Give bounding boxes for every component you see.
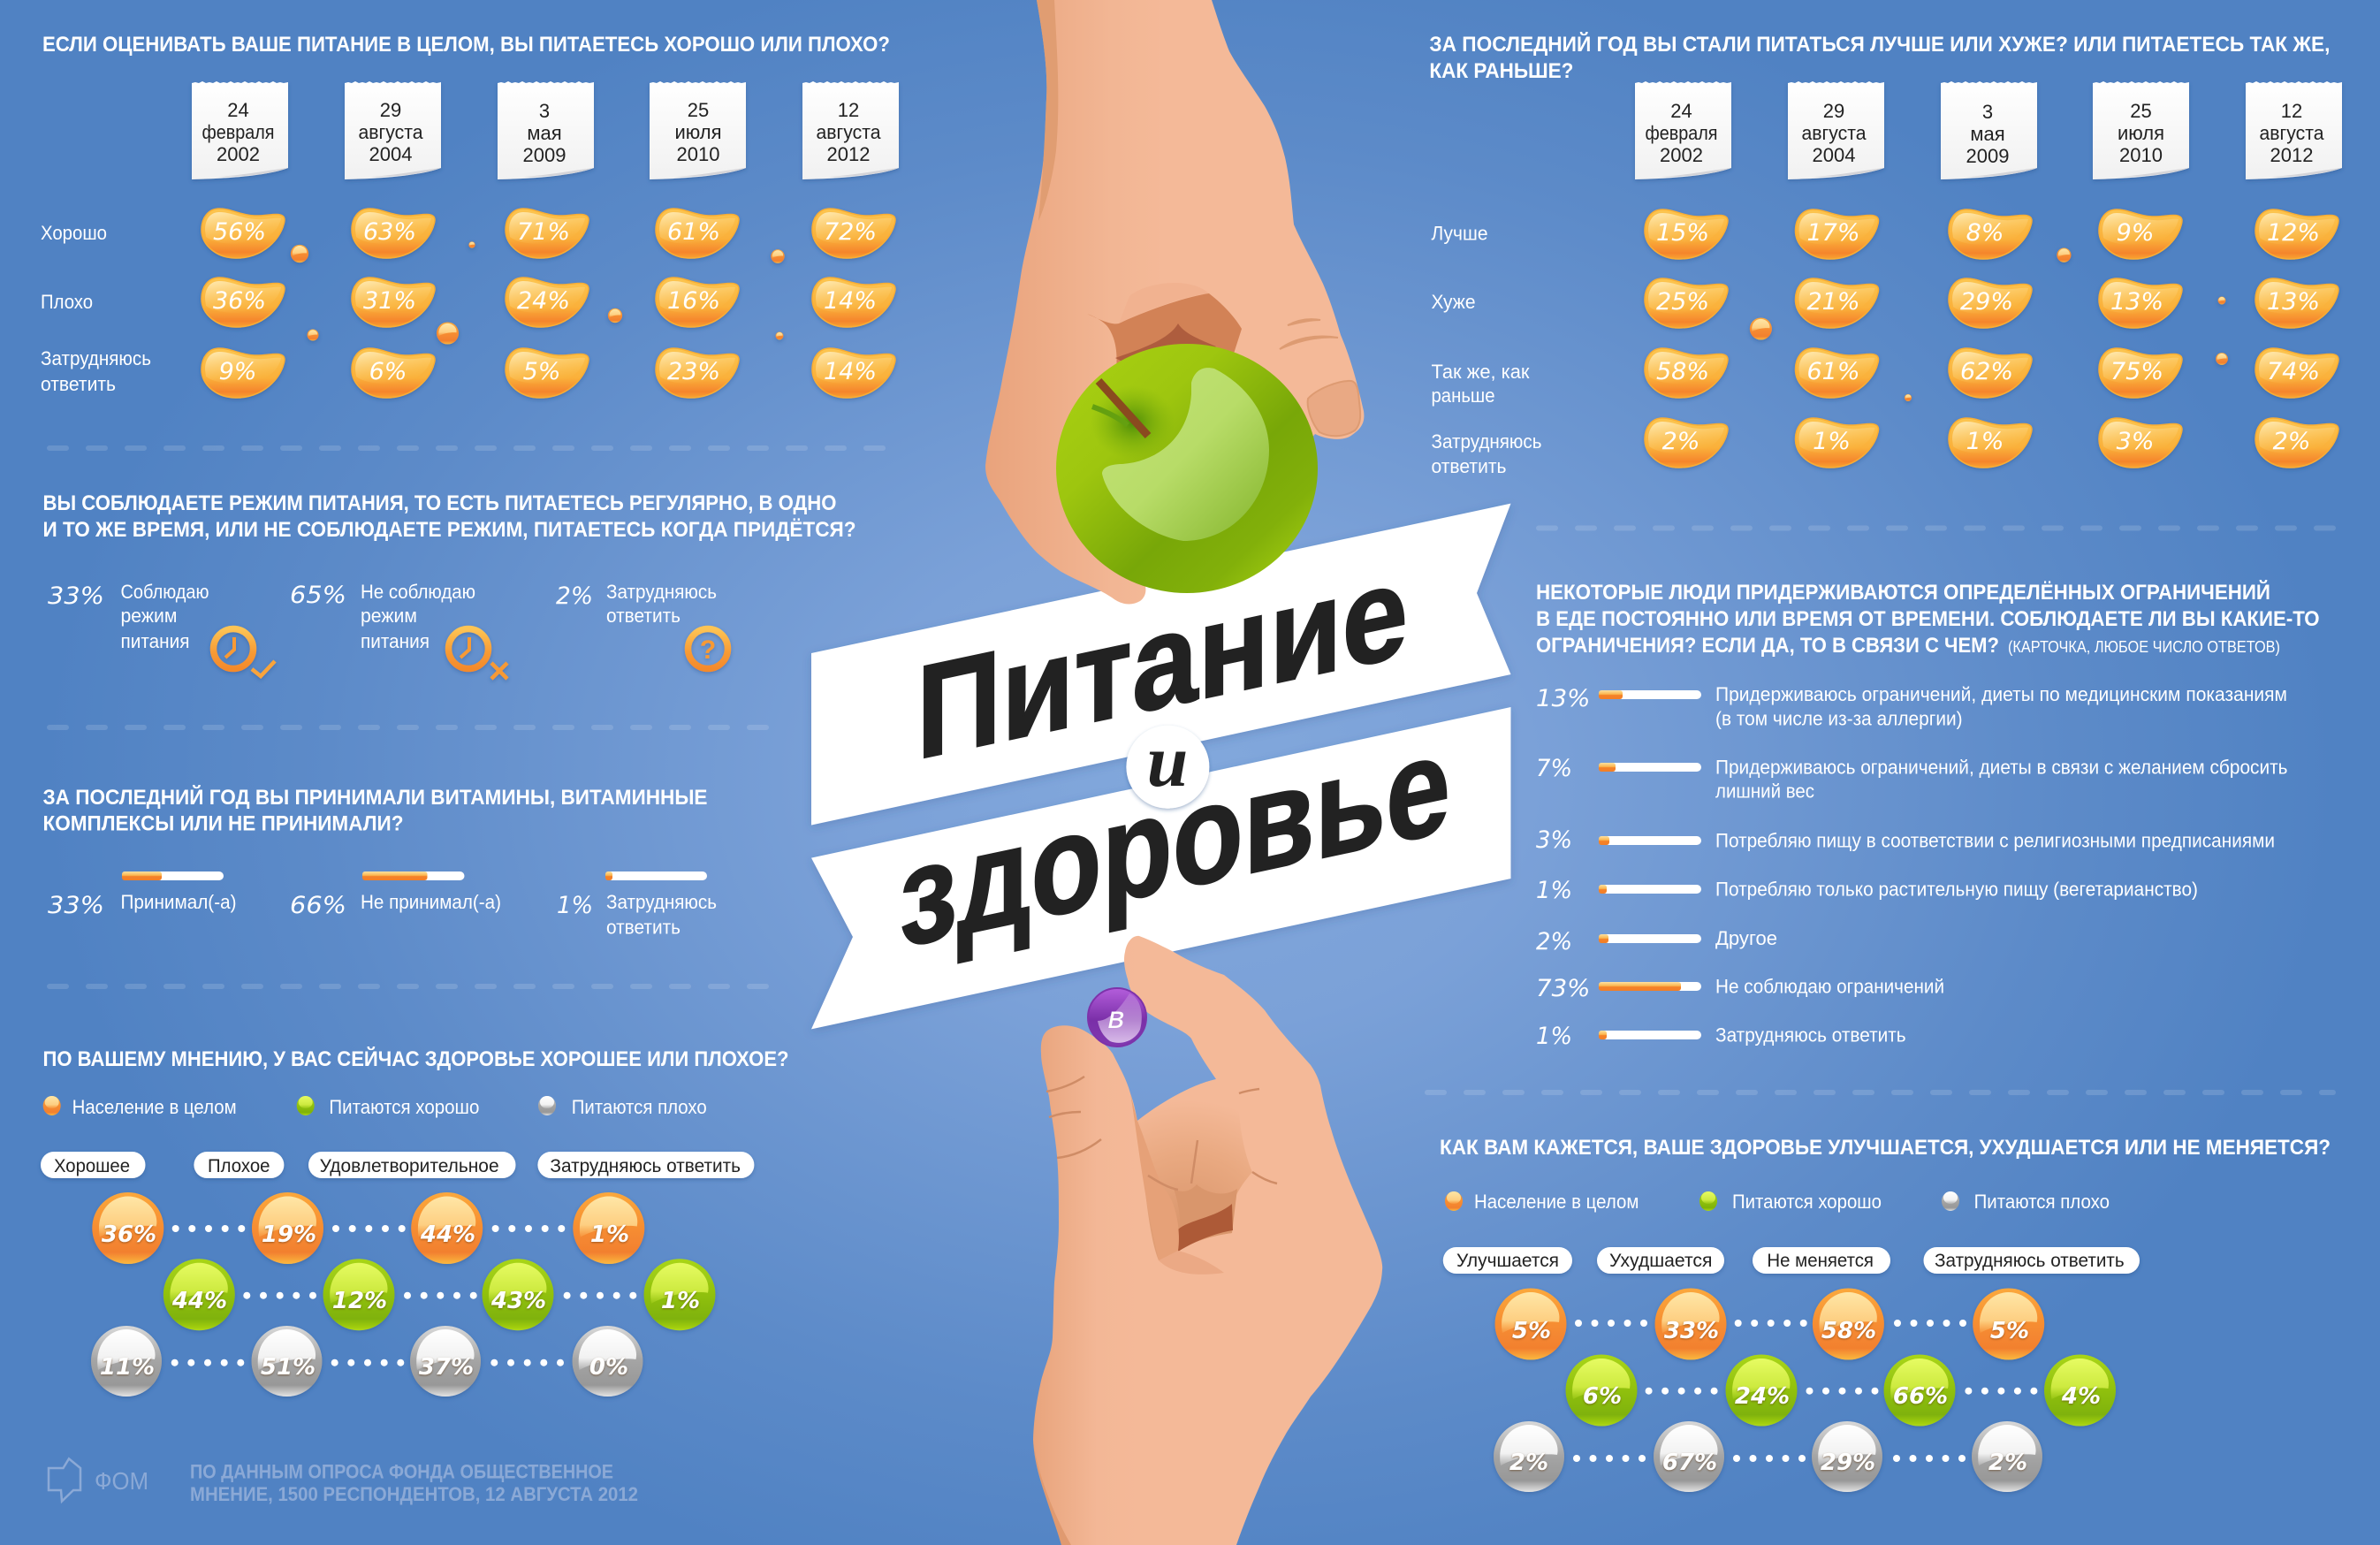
date sheets: 2004 [369, 143, 412, 165]
heading: КАК РАНЬШЕ? [1429, 59, 1573, 83]
heading: В ЕДЕ ПОСТОЯННО ИЛИ ВРЕМЯ ОТ ВРЕМЕНИ. СОБЛЮДАЕТЕ ЛИ ВЫ КАКИЕ-ТО [1536, 607, 2320, 631]
bubbles: population overall: 19% [262, 1222, 316, 1248]
answer: 66%: 66% [290, 892, 346, 919]
date sheets: 3 [539, 100, 550, 122]
title: и: и [1147, 720, 1188, 803]
date sheets: июля [2118, 122, 2164, 144]
date sheets: 12 [838, 99, 859, 121]
heading: ЕСЛИ ОЦЕНИВАТЬ ВАШЕ ПИТАНИЕ В ЦЕЛОМ, ВЫ ПИТАЕТЕСЬ ХОРОШО ИЛИ ПЛОХО? [42, 33, 890, 57]
row: Хорошо: Хорошо [41, 222, 107, 244]
answer pills [1443, 1247, 2140, 1274]
row: Плохо: 36% [213, 287, 266, 315]
row: 73% none: 73% [1536, 975, 1590, 1002]
row: Затрудняюсь ответить [1432, 418, 2338, 477]
legend: Питаются хорошо [1732, 1191, 1882, 1213]
panel: health trend [1440, 1136, 2331, 1492]
bubbles: population overall: 5% [1990, 1318, 2029, 1344]
date sheets: 25 [688, 99, 709, 121]
date sheets: 25 [2130, 100, 2152, 122]
row: Плохо: 24% [517, 287, 570, 315]
answer: 2%: ответить [606, 605, 681, 627]
answer: 65%: питания [361, 630, 430, 652]
ribbon: bottom [811, 707, 1511, 1029]
date sheets: 2012 [2270, 144, 2313, 166]
answer: 2% [556, 581, 717, 627]
date sheets: 2004 [1813, 144, 1855, 166]
row: Хорошо: 56% [213, 218, 266, 246]
answer: 33%: Принимал(-а) [120, 891, 237, 913]
row: Так же, как раньше: 61% [1806, 358, 1860, 385]
bubbles: eat poorly [1494, 1421, 2042, 1492]
row: Лучше: 8% [1966, 219, 2004, 247]
date sheets: июля [674, 121, 722, 143]
row: Хорошо: 63% [363, 218, 416, 246]
bubbles: population overall: 1% [590, 1222, 629, 1248]
answer pills: Не меняется [1767, 1251, 1874, 1271]
answer pills: Улучшается [1456, 1251, 1559, 1271]
illustration: lower hand [1033, 936, 1382, 1545]
bubbles: eat well: 44% [171, 1288, 227, 1314]
bubbles: eat well: 6% [1583, 1383, 1622, 1410]
row: Так же, как раньше: 74% [2267, 358, 2320, 385]
row: Лучше: 12% [2267, 219, 2320, 247]
heading: И ТО ЖЕ ВРЕМЯ, ИЛИ НЕ СОБЛЮДАЕТЕ РЕЖИМ, ПИТАЕТЕСЬ КОГДА ПРИДЁТСЯ? [42, 518, 855, 542]
title: здоровье: здоровье [900, 704, 1450, 978]
legend: Население в целом [72, 1096, 237, 1118]
row: Лучше: 15% [1656, 219, 1709, 247]
bubbles: eat well: 4% [2061, 1383, 2101, 1410]
heading: (КАРТОЧКА, ЛЮБОЕ ЧИСЛО ОТВЕТОВ) [2008, 638, 2280, 656]
row: 13% medical: 13% [1536, 685, 1590, 712]
bubbles: population overall: 5% [1512, 1318, 1551, 1344]
panel: health now [41, 1046, 788, 1397]
row: Затрудняюсь ответить: 5% [523, 358, 560, 385]
answer: 65%: 65% [290, 582, 346, 609]
date sheets: 24 [227, 99, 249, 121]
row: 13% medical: Придерживаюсь ограничений, диеты по медицинским показаниям [1715, 683, 2287, 705]
title: Питание: Питание [916, 536, 1408, 788]
answer: 1%: 1% [557, 892, 593, 919]
row: Хорошо: 71% [517, 218, 570, 246]
icon: clock with cross [449, 629, 507, 679]
row: Хорошо: 61% [667, 218, 720, 246]
answer: 33%: режим [120, 605, 177, 627]
row: Затрудняюсь ответить: ответить [1432, 455, 1506, 477]
answer: 66% [290, 871, 501, 919]
answer: 2%: 2% [556, 582, 593, 610]
row: Так же, как раньше: раньше [1432, 384, 1495, 407]
thumbnail [1308, 381, 1360, 436]
FOM wordmark: ФОМ [95, 1467, 148, 1495]
row: Затрудняюсь ответить: 6% [369, 358, 407, 385]
row: 2% other: Другое [1715, 927, 1777, 949]
icon: FOM logo [49, 1458, 80, 1501]
row: Затрудняюсь ответить: 1% [1813, 428, 1851, 455]
bubbles: eat well [1566, 1354, 2116, 1427]
bubbles: eat poorly [91, 1326, 643, 1397]
row: Хуже: 21% [1806, 288, 1860, 316]
row: Затрудняюсь ответить: 3% [2117, 428, 2154, 455]
date sheets: августа [1801, 122, 1867, 144]
date sheets: 2010 [2119, 144, 2163, 166]
row: Плохо: 14% [824, 287, 877, 315]
illustration: green apple [1056, 344, 1318, 593]
answer: 33%: 33% [48, 892, 104, 919]
bubbles: eat well: 12% [332, 1288, 387, 1314]
date sheets: 2002 [217, 143, 260, 165]
footer: source [49, 1458, 638, 1505]
row: Затрудняюсь ответить: Затрудняюсь [41, 347, 151, 369]
answer pills: Хорошее [54, 1156, 130, 1176]
heading: КОМПЛЕКСЫ ИЛИ НЕ ПРИНИМАЛИ? [42, 811, 403, 836]
date sheets: 12 [2281, 100, 2302, 122]
title: и [1126, 720, 1209, 809]
heading: НЕКОТОРЫЕ ЛЮДИ ПРИДЕРЖИВАЮТСЯ ОПРЕДЕЛЁННЫХ ОГРАНИЧЕНИЙ [1536, 580, 2270, 605]
row: Так же, как раньше: Так же, как [1432, 361, 1530, 383]
row: Хуже: 13% [2110, 288, 2163, 316]
bubbles: population overall: 36% [102, 1222, 156, 1248]
small drops [1750, 247, 2228, 401]
legend: Питаются плохо [572, 1096, 707, 1118]
date sheets: 29 [1823, 100, 1844, 122]
row: Затрудняюсь ответить: 1% [1966, 428, 2004, 455]
bubbles: population overall: 44% [420, 1222, 475, 1248]
answer: 65%: Не соблюдаю [361, 581, 475, 603]
heading: ПО ВАШЕМУ МНЕНИЮ, У ВАС СЕЙЧАС ЗДОРОВЬЕ ХОРОШЕЕ ИЛИ ПЛОХОЕ? [42, 1046, 788, 1071]
date sheets: 29 [380, 99, 401, 121]
date sheets: августа [359, 121, 423, 143]
row: Лучше: Лучше [1432, 223, 1488, 244]
date sheets: февраля [202, 121, 274, 143]
bubbles: eat poorly: 2% [1509, 1450, 1548, 1476]
row: Хуже: Хуже [1432, 291, 1476, 313]
answer pills [41, 1152, 754, 1178]
row: Хуже: 13% [2267, 288, 2320, 316]
row: 3% religion [1536, 826, 2275, 854]
ribbon: top [811, 504, 1511, 826]
row: Так же, как раньше [1432, 348, 2338, 407]
answer pills: Затрудняюсь ответить [550, 1156, 741, 1176]
row: Затрудняюсь ответить: Затрудняюсь [1432, 430, 1541, 453]
row: 7% weight loss: Придерживаюсь ограничений, диеты в связи с желанием сбросить [1715, 757, 2287, 778]
answer: 33%: 33% [48, 582, 104, 610]
source note: ПО ДАННЫМ ОПРОСА ФОНДА ОБЩЕСТВЕННОЕ [190, 1460, 613, 1483]
answer: 1% [557, 871, 717, 939]
answer pills: Ухудшается [1609, 1251, 1712, 1271]
answer: 65% [290, 581, 475, 652]
date sheets: августа [2259, 122, 2324, 144]
row: Затрудняюсь ответить: ответить [41, 373, 116, 395]
icon: clock with question: ? [700, 636, 716, 665]
legend: Питаются хорошо [329, 1096, 479, 1118]
legend [1445, 1191, 2110, 1213]
bubbles: eat well: 1% [661, 1288, 700, 1314]
icon: clock with check [214, 629, 275, 676]
date sheets: 2010 [677, 143, 719, 165]
small drops [291, 241, 785, 345]
row: Хуже [1432, 278, 2338, 328]
answer pills: Затрудняюсь ответить [1935, 1251, 2125, 1271]
panel: meal regimen [42, 491, 855, 679]
row: 1% hard to answer: Затрудняюсь ответить [1715, 1024, 1906, 1046]
heading [42, 785, 707, 836]
row: Хорошо: 72% [824, 218, 877, 246]
panel: overall nutrition rating [41, 33, 899, 398]
row: 2% other [1536, 927, 1777, 955]
icon: vitamin pill [1088, 988, 1146, 1046]
row: Хорошо [41, 209, 895, 258]
answer: 33% [48, 871, 237, 919]
answer pills: Плохое [208, 1156, 270, 1176]
date sheets: 2002 [1660, 144, 1703, 166]
source note: МНЕНИЕ, 1500 РЕСПОНДЕНТОВ, 12 АВГУСТА 2012 [190, 1483, 638, 1505]
heading [1536, 580, 2320, 658]
row: 13% medical: (в том числе из-за аллергии) [1715, 707, 1963, 730]
row: 7% weight loss [1536, 755, 2287, 803]
row: 1% vegetarian: 1% [1536, 877, 1572, 904]
row: 1% vegetarian [1536, 877, 2198, 904]
row: Так же, как раньше: 75% [2110, 358, 2163, 385]
row: Хуже: 25% [1656, 288, 1709, 316]
bubbles: population overall: 33% [1664, 1318, 1719, 1344]
legend: Население в целом [1474, 1191, 1639, 1213]
date sheets [192, 81, 899, 179]
bubbles: eat poorly: 11% [100, 1354, 155, 1381]
bubbles: eat poorly: 2% [1988, 1450, 2027, 1476]
row: 1% hard to answer: 1% [1536, 1023, 1572, 1050]
apple highlight [1102, 368, 1269, 541]
heading: КАК ВАМ КАЖЕТСЯ, ВАШЕ ЗДОРОВЬЕ УЛУЧШАЕТСЯ, УХУДШАЕТСЯ ИЛИ НЕ МЕНЯЕТСЯ? [1440, 1136, 2331, 1160]
heading: ВЫ СОБЛЮДАЕТЕ РЕЖИМ ПИТАНИЯ, ТО ЕСТЬ ПИТАЕТЕСЬ РЕГУЛЯРНО, В ОДНО [42, 491, 836, 515]
date sheets: мая [1970, 123, 2005, 145]
row: Затрудняюсь ответить: 9% [219, 358, 256, 385]
bubbles: eat well: 43% [490, 1288, 546, 1314]
row: Плохо: Плохо [41, 291, 93, 313]
legend: Питаются плохо [1974, 1191, 2110, 1213]
row: Лучше: 9% [2117, 219, 2154, 247]
row: Плохо: 31% [363, 287, 416, 315]
row: Лучше: 17% [1806, 219, 1860, 247]
heading: ОГРАНИЧЕНИЯ? ЕСЛИ ДА, ТО В СВЯЗИ С ЧЕМ? [1536, 634, 1999, 658]
bubbles: eat well: 24% [1735, 1383, 1790, 1410]
heading: ЗА ПОСЛЕДНИЙ ГОД ВЫ СТАЛИ ПИТАТЬСЯ ЛУЧШЕ ИЛИ ХУЖЕ? ИЛИ ПИТАЕТЕСЬ ТАК ЖЕ, [1429, 32, 2330, 57]
legend [43, 1096, 707, 1118]
date sheets: 2012 [827, 143, 870, 165]
row: Так же, как раньше: 58% [1656, 358, 1709, 385]
bubbles: population overall [92, 1192, 644, 1264]
answer: 2%: Затрудняюсь [606, 581, 717, 603]
row: 73% none: Не соблюдаю ограничений [1715, 976, 1944, 997]
date sheets: августа [817, 121, 881, 143]
row: 1% hard to answer [1536, 1023, 1906, 1050]
row: Затрудняюсь ответить: 2% [2273, 428, 2310, 455]
apple leaf [1092, 407, 1128, 425]
date sheets [1635, 81, 2342, 179]
icon: clock with question [688, 629, 728, 668]
date sheets: 3 [1982, 101, 1993, 123]
panel: dietary restrictions [1536, 580, 2320, 1050]
bubbles: population overall: 58% [1821, 1318, 1876, 1344]
date sheets: мая [527, 122, 562, 144]
answer: 1%: Затрудняюсь [606, 891, 717, 913]
row: 1% vegetarian: Потребляю только растительную пищу (вегетарианство) [1715, 879, 2198, 900]
row: 13% medical [1536, 683, 2287, 730]
row: 7% weight loss: лишний вес [1715, 780, 1814, 803]
bubbles: eat poorly: 67% [1662, 1450, 1717, 1476]
bubbles: population overall [1495, 1289, 2044, 1359]
row: 3% religion: 3% [1536, 826, 1572, 854]
apple stem [1099, 381, 1148, 436]
answer: 33%: Соблюдаю [120, 581, 209, 603]
row: Плохо: 16% [667, 287, 720, 315]
date sheets: 2009 [523, 144, 566, 166]
date sheets: 24 [1670, 100, 1692, 122]
row: 7% weight loss: 7% [1536, 755, 1572, 782]
icon: vitamin pill: в [1107, 1001, 1125, 1036]
source note [190, 1460, 638, 1505]
row: Так же, как раньше: 62% [1960, 358, 2013, 385]
answer: 33% [48, 581, 209, 652]
row: Затрудняюсь ответить: 14% [824, 358, 877, 385]
bubbles: eat poorly: 0% [589, 1354, 628, 1381]
date sheets: февраля [1646, 122, 1718, 144]
answer: 65%: режим [361, 605, 417, 627]
row: Лучше [1432, 209, 2338, 259]
answer: 66%: Не принимал(-а) [361, 891, 501, 913]
bubbles: eat poorly: 51% [261, 1354, 316, 1381]
illustration: upper hand [985, 0, 1364, 604]
panel: diet change over year [1429, 32, 2342, 477]
row: Затрудняюсь ответить [41, 347, 895, 398]
row: 73% none [1536, 975, 1944, 1002]
answer pills: Удовлетворительное [320, 1156, 499, 1176]
bubbles: eat poorly: 37% [419, 1354, 474, 1381]
bubbles: eat well: 66% [1893, 1383, 1948, 1410]
row: Затрудняюсь ответить: 2% [1662, 428, 1699, 455]
answer: 33%: питания [120, 630, 189, 652]
heading [1429, 32, 2330, 83]
answer: 1%: ответить [606, 916, 681, 939]
row: Затрудняюсь ответить: 23% [667, 358, 720, 385]
bubbles: eat poorly: 29% [1821, 1450, 1875, 1476]
heading: ЗА ПОСЛЕДНИЙ ГОД ВЫ ПРИНИМАЛИ ВИТАМИНЫ, ВИТАМИННЫЕ [42, 785, 707, 810]
row: Хуже: 29% [1960, 288, 2013, 316]
row: Плохо [41, 278, 895, 327]
row: 3% religion: Потребляю пищу в соответствии с религиозными предписаниями [1715, 829, 2275, 852]
date sheets: 2009 [1966, 145, 2009, 167]
row: 2% other: 2% [1536, 928, 1572, 955]
panel: vitamins [42, 785, 717, 939]
bubbles: eat well [163, 1259, 716, 1330]
heading [42, 491, 855, 542]
